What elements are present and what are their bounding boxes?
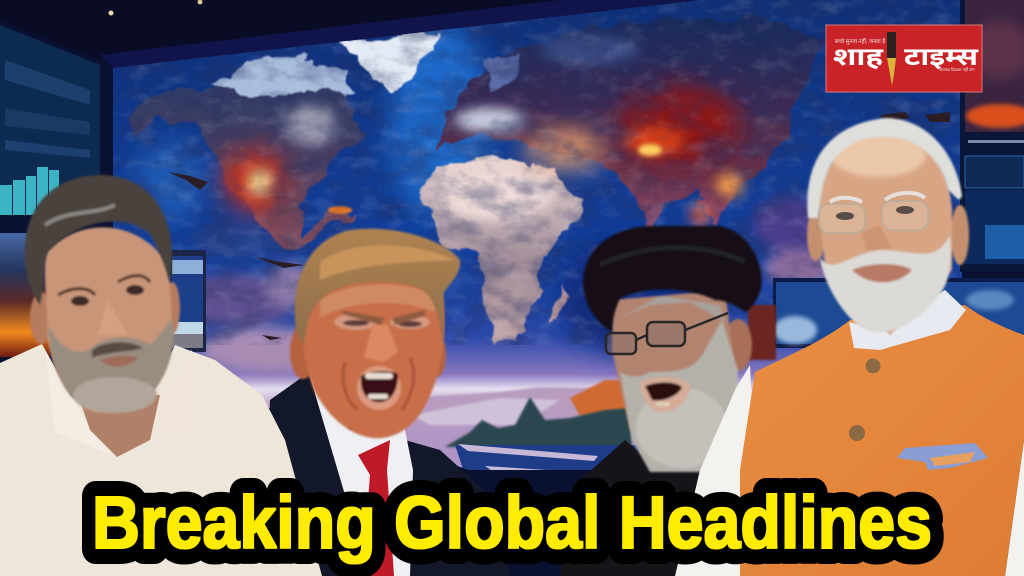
polo shirt (0, 344, 322, 576)
icon: pen nib (887, 32, 896, 86)
continents (125, 18, 825, 347)
face (30, 227, 180, 413)
neck (78, 395, 160, 457)
white collar (849, 290, 966, 350)
glasses and eyes (819, 193, 928, 233)
monitor: right data panel (960, 0, 1024, 272)
shirt collar (308, 370, 413, 576)
drones (168, 112, 950, 340)
monitor: center left screen (170, 250, 206, 352)
face (290, 269, 446, 438)
white hair (807, 118, 962, 218)
logo tagline bottom: सत्यांश दिखता नहीं जग (939, 67, 975, 72)
clouds lower left (193, 224, 306, 375)
black turban (583, 226, 762, 332)
logo: Shah Times (826, 25, 982, 92)
person: man in white polo (0, 175, 322, 576)
monitor: left data panel (0, 25, 100, 215)
pocket square (897, 443, 988, 470)
person: man in orange vest (675, 118, 1024, 576)
glasses (606, 313, 728, 354)
dark wavy hair (25, 175, 172, 305)
orange vest (740, 305, 1024, 576)
grey beard (48, 320, 173, 413)
logo tagline top: सच्चे सुनता नहीं, जनता है (835, 37, 885, 45)
face (612, 290, 752, 440)
white beard (620, 320, 738, 472)
white kurta (675, 365, 1024, 576)
map texture (113, 0, 963, 345)
map light texture (113, 0, 963, 345)
face (807, 133, 969, 335)
person: cleric with black turban (560, 226, 762, 576)
map fire glows (223, 87, 744, 225)
fire strip behind turban (748, 305, 776, 360)
purple clouds east (752, 197, 836, 286)
headline: Breaking Global Headlines (92, 481, 932, 564)
monitor: lower right screen (773, 278, 1024, 348)
white beard (820, 235, 951, 333)
vest buttons (849, 358, 880, 441)
monitor: left fire screen (0, 233, 50, 357)
blond hair (295, 229, 460, 345)
robe (560, 440, 700, 576)
red tie (358, 440, 394, 576)
logo wordmark right: टाइम्स (904, 43, 979, 71)
white highlights (284, 36, 640, 220)
suit (268, 368, 510, 576)
logo wordmark left: शाह (833, 43, 884, 71)
landscape (417, 378, 640, 470)
world map screen (113, 0, 963, 490)
person: man in dark suit, red tie (268, 229, 510, 576)
